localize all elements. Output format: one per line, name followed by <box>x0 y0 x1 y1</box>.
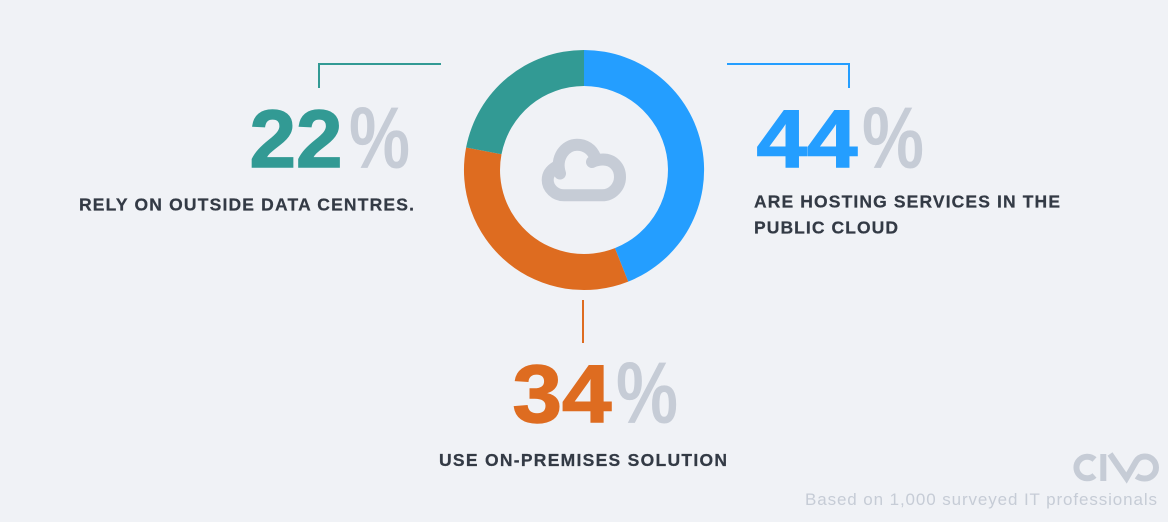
callout: 22% outside data centres <box>79 64 441 214</box>
footnote: Based on 1,000 surveyed IT professionals <box>805 490 1157 509</box>
label: USE ON-PREMISES SOLUTION <box>439 450 727 470</box>
figure: 34%: % <box>616 345 678 442</box>
segment: outside data centres 22% <box>466 50 584 154</box>
label: RELY ON OUTSIDE DATA CENTRES. <box>79 194 414 214</box>
callout: 34% on-premises <box>439 300 727 470</box>
connector line <box>727 64 849 88</box>
donut chart <box>464 50 704 290</box>
figure: 44%: % <box>862 90 924 187</box>
icon: cloud <box>548 145 620 195</box>
figure: 22%: % <box>349 90 410 187</box>
figure: 44% <box>756 90 924 187</box>
figure: 22%: 22 <box>250 94 342 185</box>
segment: on-premises 34% <box>464 148 628 290</box>
figure: 34%: 34 <box>512 349 612 440</box>
label: PUBLIC CLOUD <box>754 218 898 238</box>
segment: public cloud 44% <box>584 50 704 282</box>
label: ARE HOSTING SERVICES IN THE <box>754 192 1060 212</box>
figure: 34% <box>512 345 678 442</box>
connector line <box>319 64 441 88</box>
logo: CIVO <box>1076 454 1156 481</box>
connector line <box>582 300 584 343</box>
figure: 22% <box>250 90 410 187</box>
figure: 44%: 44 <box>756 94 858 185</box>
label <box>754 192 1060 238</box>
callout: 44% public cloud <box>727 64 1060 238</box>
